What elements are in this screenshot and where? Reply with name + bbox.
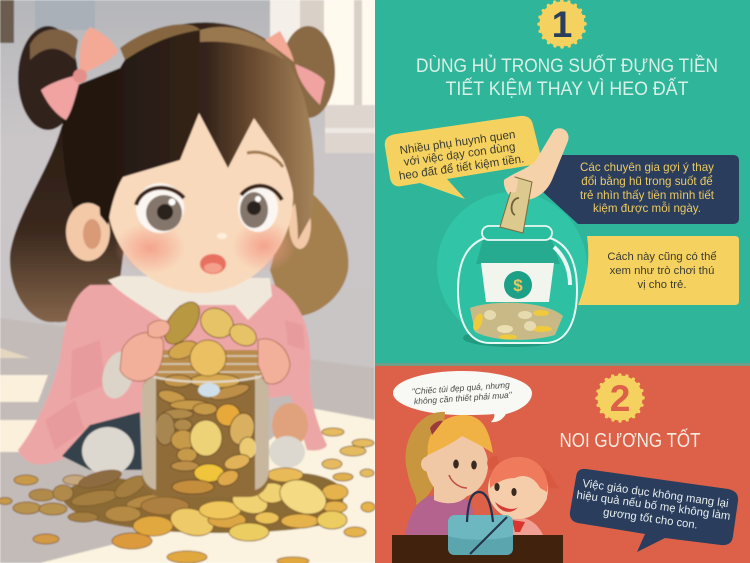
table — [392, 535, 563, 563]
navy speech bubble: Việc giáo dục không mang lại — [582, 478, 729, 510]
navy info box: Các chuyên gia gợi ý thay — [580, 161, 714, 174]
glass jar illustration — [458, 226, 577, 343]
girl left eye — [136, 183, 184, 233]
girl right eye — [238, 184, 282, 232]
coin pile on floor — [0, 428, 375, 563]
background room — [0, 0, 375, 563]
banknote — [500, 177, 532, 233]
navy speech bubble: hiệu quả nếu bố mẹ không làm — [576, 489, 731, 523]
girl hair back — [10, 26, 348, 322]
heading section 1: TIẾT KIỆM THAY VÌ HEO ĐẤT — [446, 77, 689, 100]
panel: illustrated girl with coin jar — [0, 0, 375, 563]
girl hands — [120, 320, 290, 384]
navy info box: kiệm được mỗi ngày. — [593, 202, 701, 215]
yellow info box: Cách này cũng có thể — [607, 251, 717, 263]
girl face — [107, 101, 296, 293]
yellow speech bubble: với việc dạy con dùng — [403, 140, 516, 169]
jar label — [481, 263, 554, 302]
dollar icon: $ — [513, 276, 523, 295]
handbag — [448, 492, 513, 555]
glass jar of coins — [142, 350, 269, 497]
number badge 1: 1 — [552, 4, 572, 45]
panel: section 1 teal — [375, 0, 750, 366]
number badge 2 — [597, 375, 643, 421]
yellow speech bubble: heo đất để tiết kiệm tiền. — [398, 152, 525, 183]
jacket collar — [108, 276, 272, 322]
yellow info box: vị cho trẻ. — [638, 279, 686, 291]
navy info box: đổi bằng hũ trong suốt để — [581, 175, 713, 188]
number badge 2: 2 — [610, 378, 630, 419]
navy speech bubble — [570, 469, 738, 552]
hand holding banknote — [500, 128, 569, 233]
girl ears — [66, 201, 311, 261]
girl jacket — [18, 283, 327, 464]
heading section 2: NOI GƯƠNG TỐT — [560, 428, 700, 452]
jar background circle — [437, 192, 587, 342]
white speech bubble — [393, 371, 532, 422]
daughter figure — [487, 456, 560, 535]
heading section 1: DÙNG HỦ TRONG SUỐT ĐỰNG TIỀN — [416, 53, 718, 77]
yellow speech bubble — [385, 116, 540, 199]
navy info box — [543, 155, 739, 224]
yellow speech bubble: Nhiều phụ huynh quen — [399, 128, 516, 157]
left sleeve cuff — [97, 348, 139, 402]
yellow info box — [578, 236, 739, 305]
number badge 1 — [539, 1, 585, 47]
money inside jar — [470, 303, 563, 340]
navy info box: trẻ nhìn thấy tiền mình tiết — [580, 189, 715, 202]
jar shadow — [463, 329, 563, 347]
yellow info box: xem như trò chơi thú — [610, 265, 714, 277]
heading section 1 — [416, 53, 718, 100]
navy speech bubble: gương tốt cho con. — [602, 506, 698, 532]
white speech bubble: "Chiếc túi đẹp quá, nhưng — [411, 380, 510, 396]
girl legs and shoes — [62, 403, 308, 475]
panel: section 2 orange — [375, 366, 750, 563]
mother figure — [405, 412, 493, 535]
coins overflowing from jar — [158, 296, 260, 376]
right hair bow — [265, 31, 325, 105]
white speech bubble: không cần thiết phải mua" — [414, 390, 513, 406]
jacket plaid shading — [45, 320, 305, 450]
left hair bow — [41, 27, 118, 120]
girl fringe — [99, 22, 314, 240]
girl nose and mouth — [200, 233, 227, 274]
